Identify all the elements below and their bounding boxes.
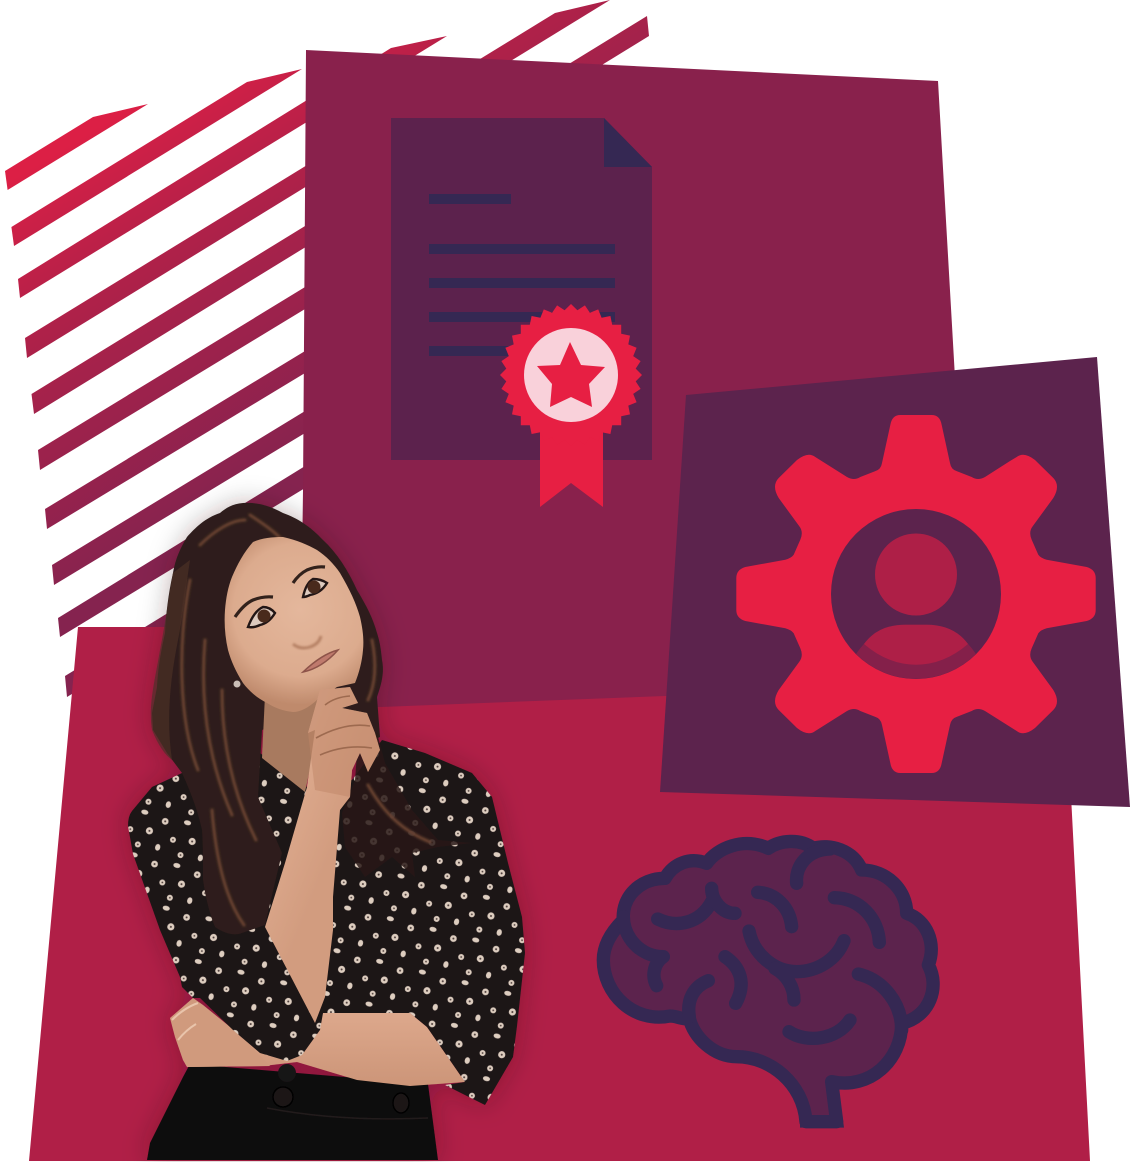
user head <box>875 534 957 616</box>
icon: gear with user <box>736 415 1096 773</box>
eyebrows <box>235 567 325 617</box>
brain stem base <box>800 1115 844 1128</box>
icon: brain <box>603 841 933 1128</box>
icon: certificate document <box>391 118 652 507</box>
star <box>537 342 605 407</box>
user body shadow <box>856 625 976 679</box>
hair highlights <box>182 515 430 925</box>
knuckle highlights <box>172 1003 198 1040</box>
long dark hair <box>151 503 472 934</box>
finger lines <box>316 696 372 755</box>
panel: purple gear panel <box>660 357 1130 807</box>
panel: maroon certificate panel <box>300 50 962 720</box>
raised forearm and hand at chin <box>265 687 380 1023</box>
rosette seal <box>500 304 642 446</box>
document sheet <box>391 118 652 460</box>
right hair strands over blouse <box>342 733 472 877</box>
polka dot blouse <box>128 740 525 1105</box>
panel: crimson brain panel <box>29 627 1090 1161</box>
hand shading <box>308 687 380 797</box>
brain folds <box>623 849 902 1038</box>
black trousers <box>147 1064 438 1160</box>
ribbon tails <box>540 425 603 507</box>
brain outline <box>603 841 933 1122</box>
gear body <box>736 415 1096 773</box>
gear centre hole <box>831 509 1001 679</box>
main hair mass <box>152 503 383 934</box>
neck <box>262 695 318 792</box>
nose <box>293 636 321 648</box>
diagonal stripes background <box>5 0 649 697</box>
ear with earring <box>234 680 240 688</box>
left eye <box>248 607 275 627</box>
woman thinking <box>128 503 525 1160</box>
folded forearm and lower hand <box>170 998 465 1086</box>
face <box>225 537 363 712</box>
user body <box>864 625 968 665</box>
folded corner <box>604 118 652 167</box>
seal inner disc <box>524 328 618 422</box>
outer hair wisps <box>151 560 190 760</box>
document text lines <box>429 194 615 356</box>
mouth <box>303 650 338 672</box>
right eye <box>303 579 327 597</box>
